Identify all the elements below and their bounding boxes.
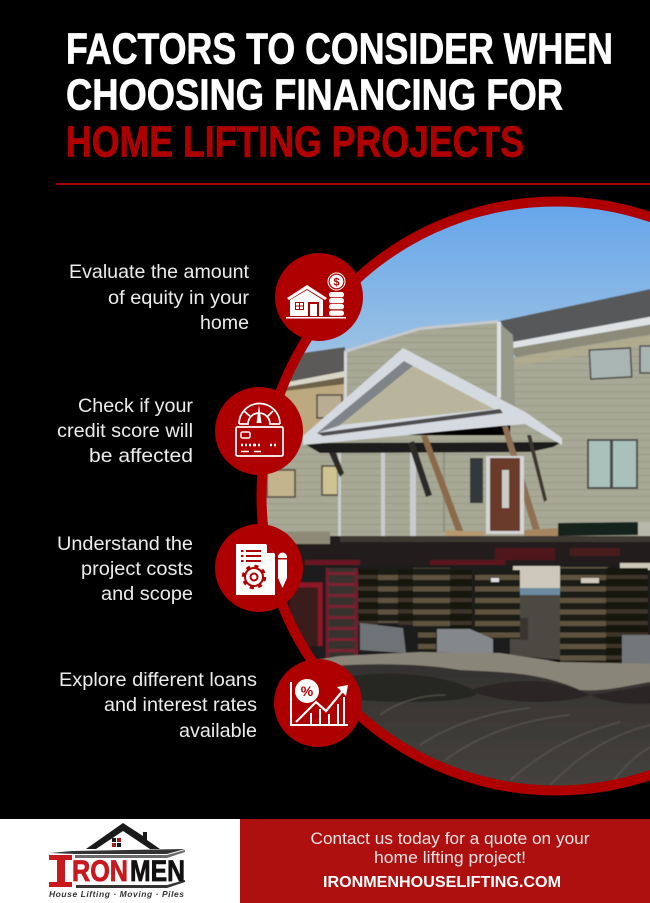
title line 3: HOME LIFTING PROJECTS <box>66 118 524 166</box>
step 2: credit score <box>57 387 303 475</box>
title <box>66 24 613 166</box>
cribbing piles <box>358 567 648 663</box>
step 3 text: Understand the <box>57 533 193 555</box>
step 3 text: project costs <box>81 558 193 580</box>
upper windows <box>589 348 632 379</box>
footer contact panel <box>240 819 650 903</box>
step 4 text <box>59 669 257 742</box>
footer logo panel <box>0 819 240 903</box>
red circular frame <box>262 202 650 790</box>
step 3: costs and scope <box>57 524 303 612</box>
red cribbing and frame <box>290 568 358 660</box>
background behind cribbing <box>255 565 650 660</box>
step 3 text: and scope <box>101 583 193 605</box>
step 3 text <box>57 533 193 605</box>
door <box>486 456 524 534</box>
step 4 text: and interest rates <box>104 694 257 716</box>
centre upper wall <box>346 322 498 398</box>
icon: house and coins: $ <box>333 276 340 288</box>
icon: credit card with gauge <box>215 387 303 475</box>
step 4 text: Explore different loans <box>59 669 257 691</box>
right wall <box>509 334 650 436</box>
gable white trim <box>303 348 562 445</box>
contact text: home lifting project! <box>374 848 526 867</box>
logo wordmark <box>49 855 185 888</box>
step 1 text <box>69 261 250 334</box>
icon: house and coins <box>275 253 363 341</box>
gable soffit <box>317 361 413 433</box>
icon: growth chart with percent <box>274 659 362 747</box>
step 4 text: available <box>179 720 257 742</box>
gable infill <box>340 366 494 425</box>
sand <box>317 651 650 692</box>
excavated dirt <box>340 664 650 786</box>
step 2 text: be affected <box>89 445 193 467</box>
logo wordmark: RON <box>72 855 128 888</box>
right upper roof <box>500 286 650 343</box>
lower left windows <box>267 470 295 497</box>
contact text <box>310 829 590 891</box>
step 1: equity <box>69 253 363 341</box>
logo wordmark: MEN <box>130 855 185 888</box>
lower right window <box>588 440 637 488</box>
step 2 text <box>57 395 194 467</box>
website: IRONMENHOUSELIFTING.COM <box>323 874 561 891</box>
left upper roof <box>290 346 346 382</box>
sky <box>286 206 650 390</box>
trim posts <box>338 447 341 537</box>
side wall strip <box>498 322 515 410</box>
photo of lifted house in circular frame <box>255 200 650 800</box>
lower wall <box>266 434 511 537</box>
icon: document with gear and pencil <box>215 524 303 612</box>
step 4: loans and rates <box>59 659 362 747</box>
concrete blocks <box>360 618 650 665</box>
title line 2: CHOOSING FINANCING FOR <box>66 70 563 120</box>
step 2 text: credit score will <box>57 420 193 442</box>
icon: growth chart with percent: % <box>301 683 314 699</box>
step 1 text: Evaluate the amount <box>69 261 250 283</box>
contact text: Contact us today for a quote on your <box>310 829 590 848</box>
step 1 text: home <box>200 312 249 334</box>
tyre tracks <box>380 695 650 785</box>
porch braces <box>329 453 344 477</box>
porch underside <box>303 442 562 453</box>
logo roof <box>50 823 185 888</box>
logo tagline: House Lifting · Moving · Piles <box>49 889 184 899</box>
lifting beams <box>296 536 650 566</box>
step 2 text: Check if your <box>78 395 194 417</box>
logo: Ironmen <box>49 823 185 899</box>
gable dark band <box>317 409 503 436</box>
step 1 text: of equity in your <box>108 287 250 309</box>
